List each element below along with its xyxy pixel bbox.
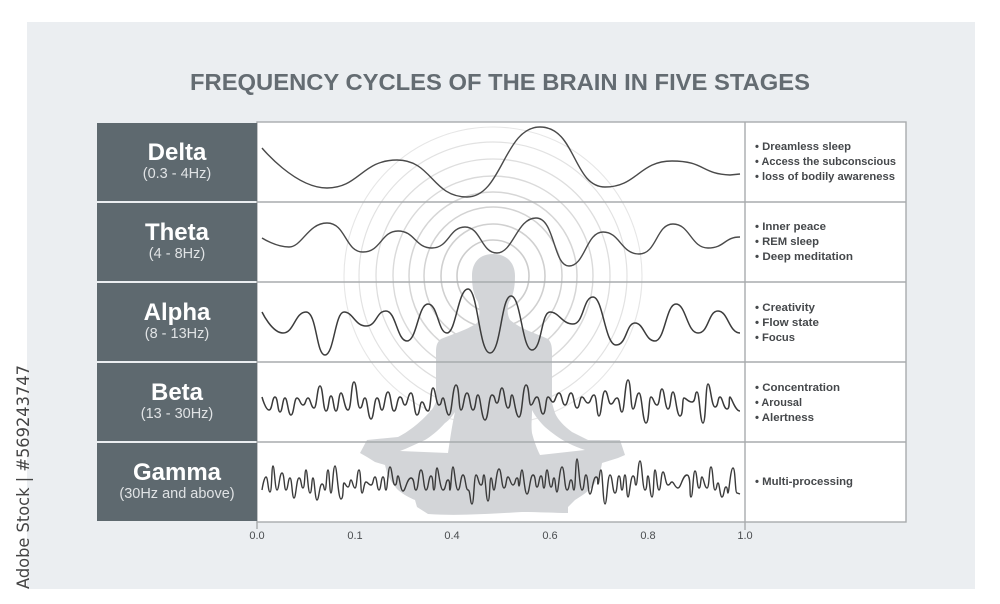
x axis labels xyxy=(249,530,753,542)
x axis labels: 1.0 xyxy=(737,530,753,542)
x axis labels: 0.8 xyxy=(640,530,656,542)
icon: meditating figure silhouette xyxy=(360,254,625,515)
wave: gamma xyxy=(262,459,740,504)
label cell: Alpha xyxy=(97,283,257,361)
wave: beta xyxy=(262,380,740,423)
label cell: Gamma: Gamma xyxy=(133,459,222,486)
grid lines xyxy=(257,122,906,530)
notes: Delta: • loss of bodily awareness xyxy=(755,171,895,183)
concentric rings xyxy=(344,127,642,425)
notes: Gamma: • Multi-processing xyxy=(755,476,853,488)
label cell: Delta: (0.3 - 4Hz) xyxy=(143,166,211,182)
label cell: Delta xyxy=(97,123,257,201)
wave: alpha xyxy=(262,289,740,355)
x axis labels: 0.4 xyxy=(444,530,460,542)
notes: Beta: • Arousal xyxy=(755,397,802,409)
label cell: Theta: (4 - 8Hz) xyxy=(149,246,205,262)
label cell: Beta: (13 - 30Hz) xyxy=(141,406,213,422)
notes: Beta xyxy=(755,382,840,424)
label cell: Gamma: (30Hz and above) xyxy=(119,486,235,502)
wave: theta xyxy=(262,218,740,266)
label cell: Theta xyxy=(97,203,257,281)
notes: Alpha: • Flow state xyxy=(755,317,819,329)
notes: Delta: • Access the subconscious xyxy=(755,156,896,168)
notes: Delta xyxy=(755,141,896,183)
x axis labels: 0.6 xyxy=(542,530,558,542)
label cell: Gamma xyxy=(97,443,257,521)
x axis labels: 0.1 xyxy=(347,530,363,542)
notes: Beta: • Alertness xyxy=(755,412,814,424)
notes: Theta: • REM sleep xyxy=(755,236,819,248)
title: FREQUENCY CYCLES OF THE BRAIN IN FIVE STAGES xyxy=(190,69,810,95)
label cell: Beta: Beta xyxy=(151,379,204,406)
wave: delta xyxy=(262,127,740,197)
label cell: Alpha: (8 - 13Hz) xyxy=(145,326,209,342)
notes: Alpha: • Focus xyxy=(755,332,795,344)
label cell: Beta xyxy=(97,363,257,441)
label cell: Theta: Theta xyxy=(145,219,210,246)
notes: Theta: • Deep meditation xyxy=(755,251,853,263)
notes: Alpha xyxy=(755,302,819,344)
notes: Theta: • Inner peace xyxy=(755,221,826,233)
notes: Theta xyxy=(755,221,853,263)
notes: Alpha: • Creativity xyxy=(755,302,816,314)
stock id text: Adobe Stock | #569243747 xyxy=(14,365,34,589)
notes: Beta: • Concentration xyxy=(755,382,840,394)
notes: Delta: • Dreamless sleep xyxy=(755,141,851,153)
chart area xyxy=(257,122,906,522)
x axis labels: 0.0 xyxy=(249,530,265,542)
label cell: Alpha: Alpha xyxy=(144,299,211,326)
label cell: Delta: Delta xyxy=(148,139,207,166)
